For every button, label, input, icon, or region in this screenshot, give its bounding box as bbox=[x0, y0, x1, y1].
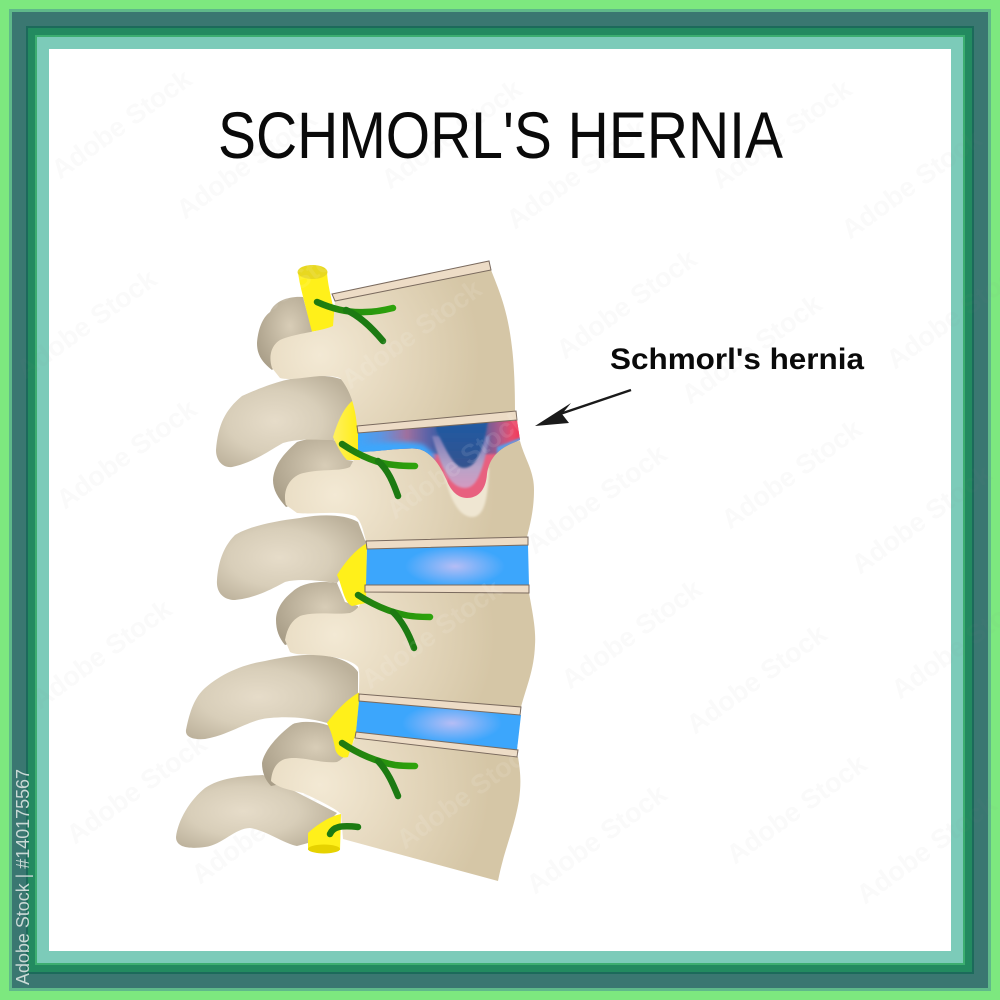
watermark over spine: Adobe Stock bbox=[391, 733, 543, 855]
vertebra body 1 bbox=[270, 270, 515, 426]
arrow to hernia bbox=[535, 390, 631, 426]
background watermarks: Adobe Stock bbox=[376, 73, 528, 195]
vertebra body 2 bbox=[285, 441, 534, 541]
background watermarks: Adobe Stock bbox=[186, 768, 338, 890]
watermark over spine: Adobe Stock bbox=[211, 228, 363, 350]
stock id side text: Adobe Stock | #140175567 bbox=[13, 769, 33, 985]
background watermarks: Adobe Stock bbox=[171, 103, 323, 225]
hernia disc color bbox=[358, 420, 520, 498]
articular process 2 bbox=[273, 438, 360, 507]
background watermarks: Adobe Stock bbox=[46, 63, 198, 185]
healthy disc 2 bbox=[366, 545, 529, 585]
spinous process 1 bbox=[216, 376, 356, 467]
disc 3 lower plate bbox=[355, 732, 518, 757]
vertebra body 4 bbox=[271, 738, 520, 881]
background watermarks: Adobe Stock bbox=[521, 778, 673, 900]
herniated disc bbox=[358, 420, 520, 518]
green nerves bbox=[317, 302, 430, 834]
yellow nerve root 3 bbox=[327, 692, 360, 758]
background watermarks: Adobe Stock bbox=[51, 393, 203, 515]
yellow nerve root 2 bbox=[337, 543, 367, 606]
disc 2 lower plate bbox=[365, 585, 529, 593]
background watermarks: Adobe Stock bbox=[716, 413, 868, 535]
background watermarks: Adobe Stock bbox=[681, 618, 833, 740]
background watermarks: Adobe Stock bbox=[551, 243, 703, 365]
background watermarks: Adobe Stock bbox=[836, 123, 988, 245]
spinous process 3 bbox=[186, 655, 358, 739]
spine diagram bbox=[176, 228, 543, 881]
background watermarks: Adobe Stock bbox=[721, 748, 873, 870]
upper plate of herniated disc bbox=[357, 411, 517, 433]
healthy disc 3 bbox=[356, 701, 521, 750]
background watermarks: Adobe Stock bbox=[501, 113, 653, 235]
background watermarks: Adobe Stock bbox=[11, 263, 163, 385]
disc 2 upper plate bbox=[366, 537, 528, 549]
background watermarks: Adobe Stock bbox=[26, 593, 178, 715]
background watermarks: Adobe Stock bbox=[846, 458, 998, 580]
label: Schmorl's hernia: Schmorl's hernia bbox=[610, 343, 864, 376]
background watermarks: Adobe Stock bbox=[706, 73, 858, 195]
watermark over spine bbox=[211, 228, 543, 855]
watermark over spine: Adobe Stock bbox=[381, 403, 533, 525]
spinous process 2 bbox=[217, 515, 366, 600]
disc 3 upper plate bbox=[359, 694, 521, 715]
watermark over spine: Adobe Stock bbox=[356, 573, 508, 695]
yellow nerve root, bottom bbox=[308, 814, 341, 854]
background watermarks: Adobe Stock bbox=[61, 728, 213, 850]
vertebra body 3 bbox=[285, 592, 535, 707]
lowest spinous process bbox=[176, 775, 337, 848]
watermark over spine: Adobe Stock bbox=[336, 273, 488, 395]
yellow nerve root 1 bbox=[333, 398, 360, 460]
background watermarks: Adobe Stock bbox=[851, 788, 1000, 910]
articular process 3 bbox=[276, 582, 358, 645]
background watermarks: Adobe Stock bbox=[521, 438, 673, 560]
articular process 4 bbox=[262, 722, 352, 786]
background watermarks: Adobe Stock bbox=[676, 288, 828, 410]
title: SCHMORL'S HERNIA bbox=[218, 98, 783, 172]
yellow nerve tube, top bbox=[298, 265, 336, 332]
hernia outer beige layer bbox=[443, 468, 489, 517]
background watermarks: Adobe Stock bbox=[556, 573, 708, 695]
top end plate bbox=[332, 261, 491, 301]
articular process 1 bbox=[257, 297, 312, 370]
